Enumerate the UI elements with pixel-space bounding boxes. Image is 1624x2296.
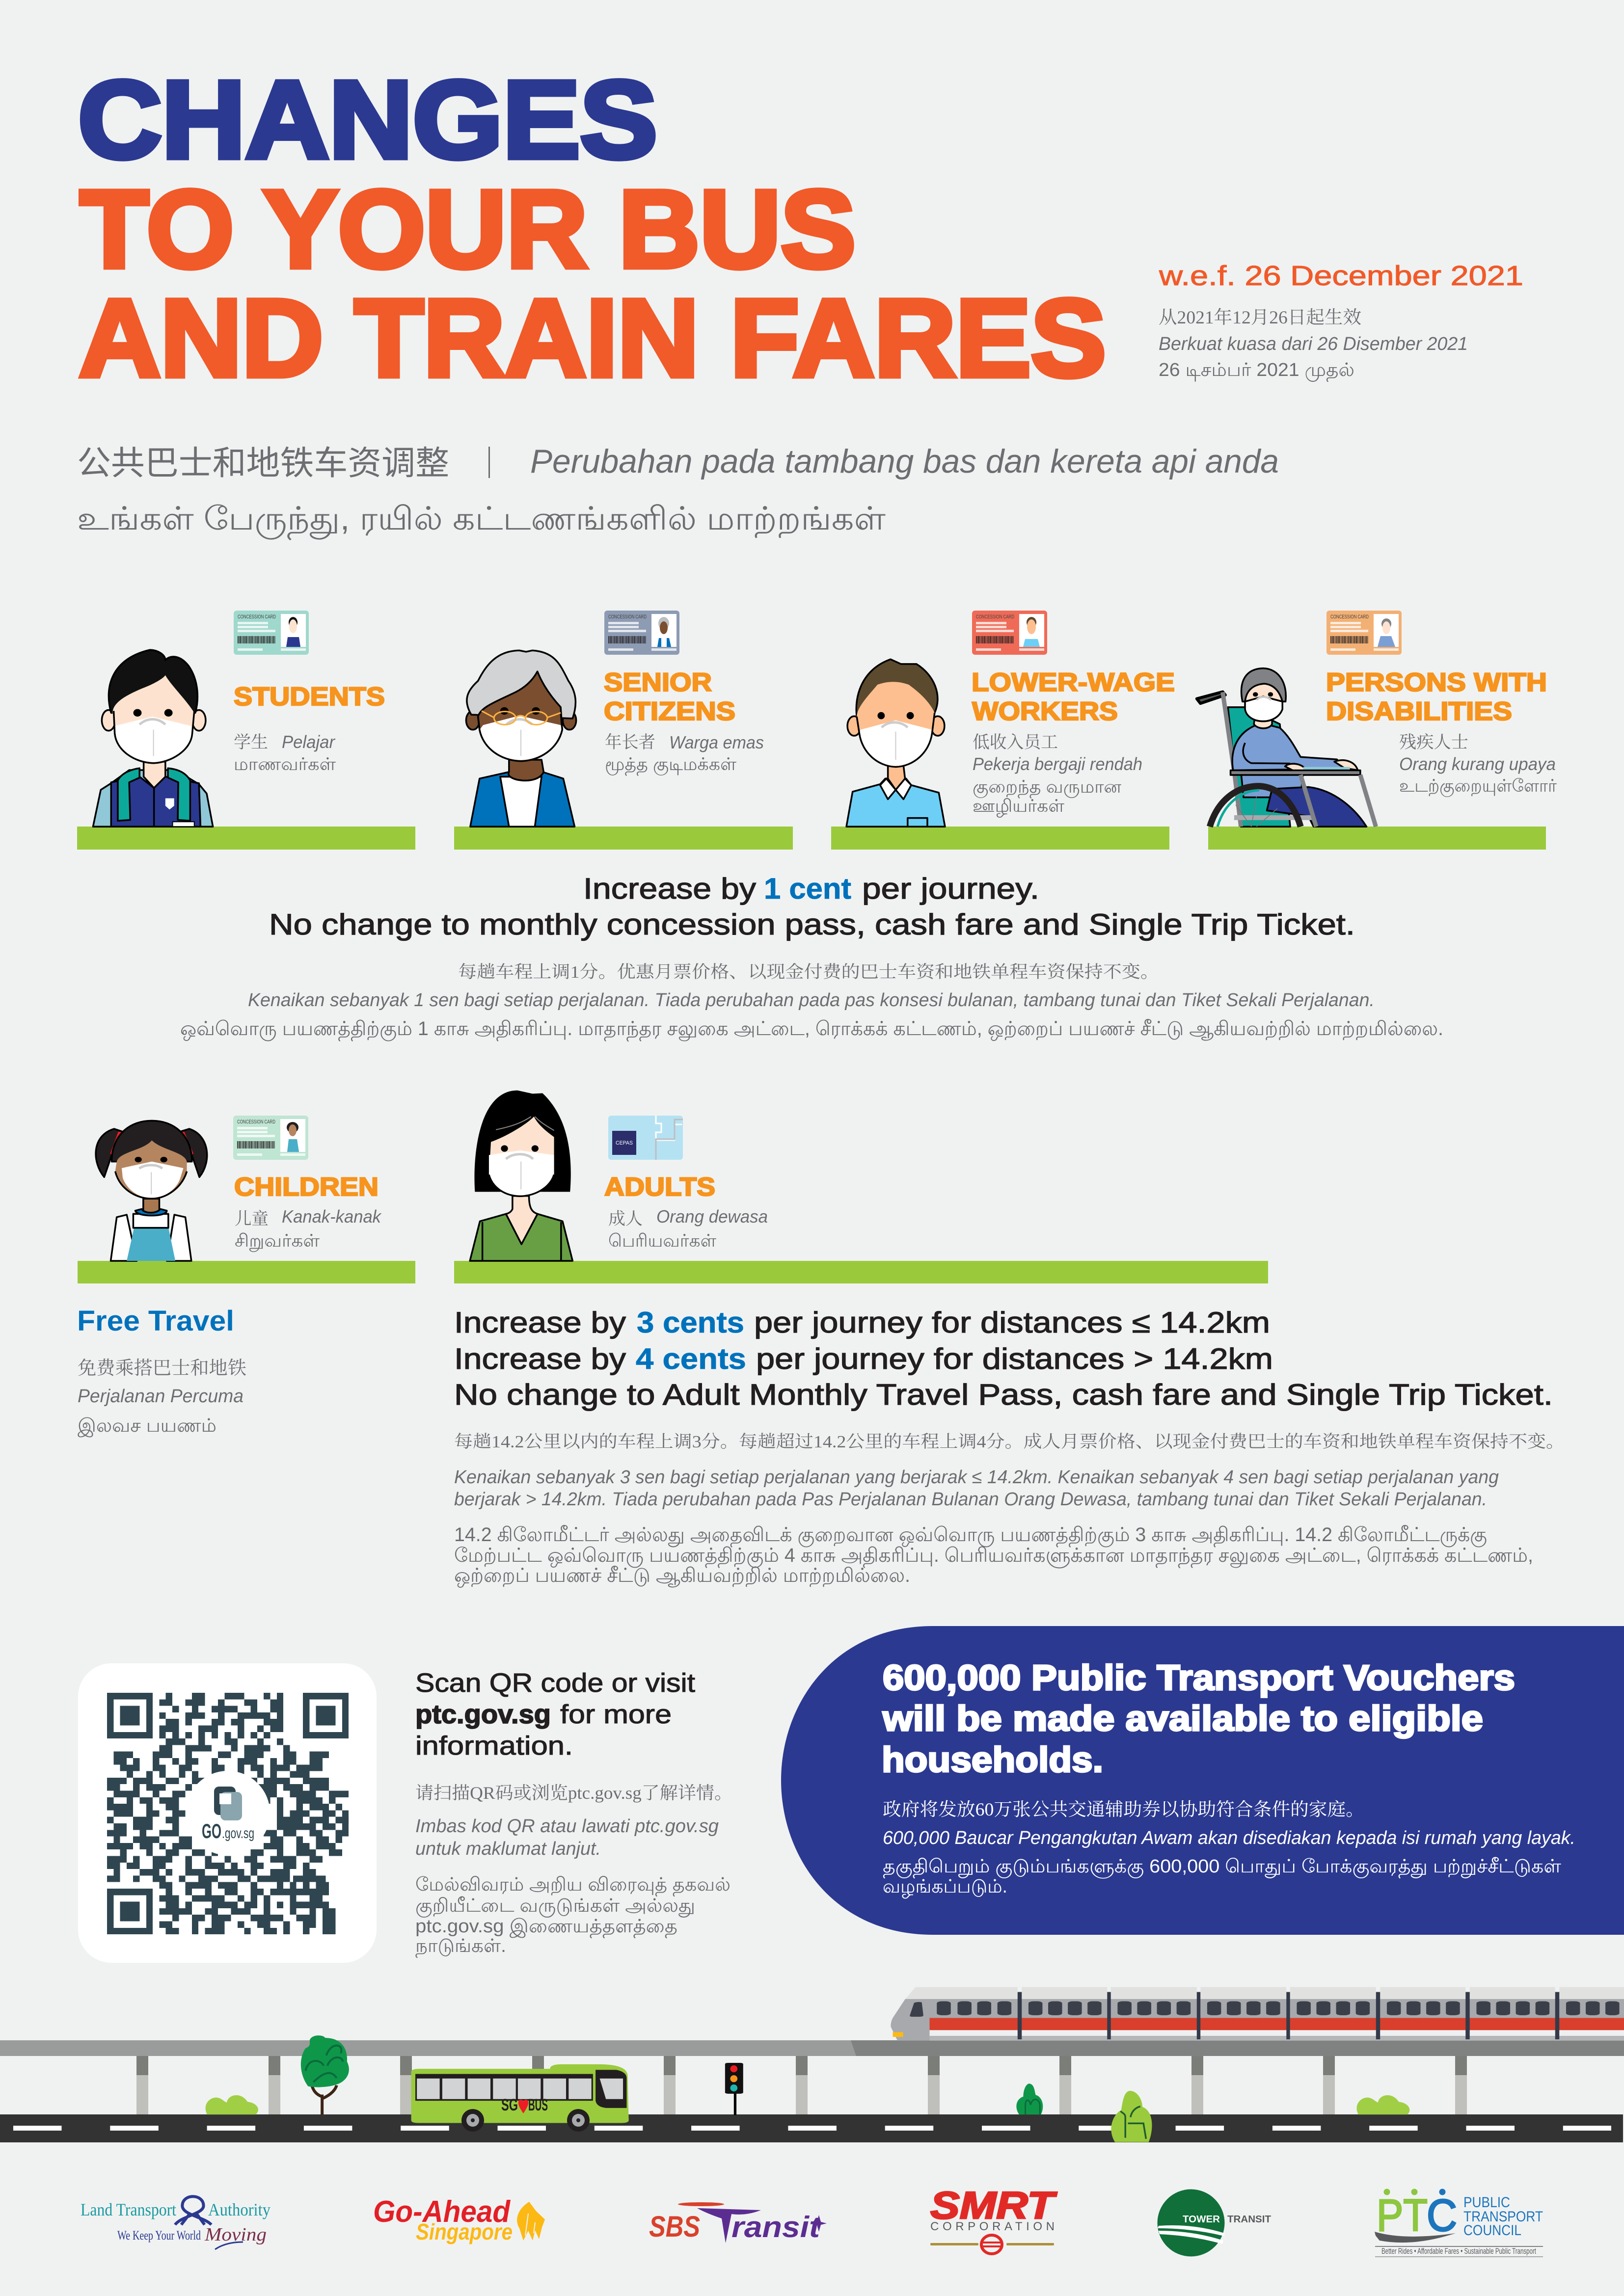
green bars [77,827,1546,850]
label: persons with disabilities: Orang kurang upaya [1399,754,1556,774]
free travel text: 免费乘搭巴士和地铁 [78,1358,246,1379]
QR code card: .gov.sg [222,1825,254,1842]
logo: Tower Transit: TOWER [1183,2214,1220,2225]
fare change: concession: Kenaikan sebanyak 1 sen bagi setiap perjalanan. Tiada perubahan pada pas konsesi bulanan, tambang tunai dan Tiket Sekali Perjalanan. [248,990,1375,1011]
QR instructions: 请扫描QR码或浏览ptc.gov.sg了解详情。 [415,1783,732,1803]
free travel text [77,1305,246,1437]
fare change: concession: 1 cent [764,872,851,905]
multilingual subtitle: Perubahan pada tambang bas dan kereta api anda [530,443,1279,480]
figure: child [96,1121,207,1261]
viaduct [0,2040,1624,2114]
label: students: Pelajar [282,732,336,752]
logo: Land Transport Authority: Land Transport [81,2200,176,2219]
label: students: மாணவர்கள் [234,754,336,774]
panel: public transport vouchers: 政府将发放60万张公共交通辅助券以协助符合条件的家庭。 [883,1799,1364,1820]
bus [411,2064,629,2132]
panel: concession groups [77,611,1557,850]
fare change: concession: Increase by [583,872,756,905]
fare change: adults [454,1306,1565,1588]
multilingual subtitle [77,443,1279,540]
panel: public transport vouchers: 600,000 Baucar Pengangkutan Awam akan disediakan kepada isi rumah yang layak. [883,1828,1575,1848]
fare change: adults: மேற்பட்ட ஒவ்வொரு பயணத்திற்கும் 4 காசு அதிகரிப்பு. பெரியவர்களுக்கான மாதாந்தர சலுகை அட்டை, ரொக்கக் கட்டணம், [454,1545,1533,1568]
free travel text: இலவச பயணம் [78,1415,217,1437]
label: persons with disabilities: DISABILITIES [1326,697,1512,726]
QR instructions [415,1668,732,1958]
fare change: concession [180,872,1443,1041]
logo: Land Transport Authority: Moving [204,2224,267,2245]
QR instructions: information. [415,1731,573,1761]
effective date: w.e.f. 26 December 2021 [1159,260,1523,292]
fare change: concession: per journey. [862,872,1039,905]
QR instructions: குறியீட்டை வருடுங்கள் அல்லது [415,1896,695,1918]
panel: public transport vouchers: will be made available to eligible [882,1699,1483,1738]
panel: public transport vouchers: வழங்கப்படும். [883,1876,1007,1899]
figure: adult [470,1091,572,1261]
label: lower-wage workers: Pekerja bergaji rendah [973,754,1142,774]
logo: Public Transport Council: PUBLIC [1463,2194,1510,2211]
card: children: CONCESSION CARD [237,1119,275,1125]
card: students: CONCESSION CARD [238,614,276,620]
card: senior citizens [604,611,679,655]
logo: Land Transport Authority [81,2196,271,2249]
label: persons with disabilities: PERSONS WITH [1326,668,1547,697]
label: children [234,1173,382,1252]
label: adults: பெரியவர்கள் [608,1230,717,1251]
QR instructions: மேல்விவரம் அறிய விரைவுத் தகவல் [415,1874,731,1896]
label: adults: Orang dewasa [656,1206,768,1227]
free travel text: Free Travel [77,1305,234,1337]
QR instructions: ptc.gov.sg [415,1700,551,1729]
effective date: 从2021年12月26日起生效 [1159,307,1361,328]
logo: SBS Transit: ransit [731,2211,821,2243]
label: senior citizens [604,668,764,776]
bus: BUS [528,2096,548,2114]
logo: SMRT Corporation: CORPORATION [930,2220,1055,2233]
label: students: STUDENTS [234,682,385,711]
fare change: adults: 3 cents [637,1306,744,1339]
card: lower-wage workers [972,611,1047,655]
label: lower-wage workers: குறைந்த வருமான [973,776,1121,799]
plants right [1016,2083,1409,2142]
logo: Public Transport Council: C [1427,2190,1457,2241]
panel: public transport vouchers: households. [882,1740,1103,1780]
card: students [234,611,309,655]
label: senior citizens: CITIZENS [604,697,735,726]
tree and shrub left [206,2035,349,2114]
multilingual subtitle: உங்கள் பேருந்து, ரயில் கட்டணங்களில் மாற்றங்கள் [77,500,886,540]
QR code card [78,1663,377,1963]
logo: Go-Ahead Singapore: Go-Ahead [373,2195,511,2229]
QR instructions: Scan QR code or visit [415,1668,695,1698]
label: lower-wage workers: 低收入员工 [973,733,1058,752]
logo: Go-Ahead Singapore: Singapore [416,2219,513,2244]
label: lower-wage workers: ஊழியர்கள் [973,796,1065,818]
fare change: adults: Increase by [454,1342,626,1375]
label: lower-wage workers [972,668,1175,818]
label: senior citizens: மூத்த குடிமக்கள் [605,754,737,776]
effective date [1159,260,1523,382]
train [891,1987,1624,2041]
QR instructions: நாடுங்கள். [415,1936,506,1958]
logo: Land Transport Authority: Authority [208,2200,271,2219]
traffic light [725,2063,743,2115]
fare change: concession: No change to monthly concession pass, cash fare and Single Trip Ticket. [269,908,1355,941]
QR instructions: Imbas kod QR atau lawati ptc.gov.sg [415,1816,719,1837]
QR instructions: untuk maklumat lanjut. [415,1839,601,1859]
title: TO YOUR BUS [80,168,856,291]
panel: public transport vouchers [781,1626,1624,1935]
title: CHANGES [78,58,657,181]
label: lower-wage workers: WORKERS [972,697,1118,726]
title [78,58,1106,400]
label: children: Kanak-kanak [282,1206,382,1227]
effective date: 26 டிசம்பர் 2021 முதல் [1159,360,1354,382]
label: students: 学生 [234,733,268,752]
panel: public transport vouchers: 600,000 Public Transport Vouchers [883,1658,1515,1698]
QR instructions: ptc.gov.sg இணையத்தளத்தை [415,1916,677,1938]
logo: Public Transport Council: COUNCIL [1463,2222,1521,2239]
logo: SBS Transit: SBS [649,2210,700,2243]
label: adults [604,1173,768,1251]
fare change: adults: per journey for distances > 14.2km [756,1342,1273,1375]
fare change: adults: Kenaikan sebanyak 3 sen bagi setiap perjalanan yang berjarak ≤ 14.2km. Kenaikan sebanyak 4 sen bagi setiap perjalanan yang [454,1467,1499,1488]
label: persons with disabilities [1326,668,1557,797]
label: senior citizens: 年长者 [605,733,655,752]
logo: SMRT Corporation: SMRT [930,2184,1057,2227]
title: AND TRAIN FARES [79,277,1106,400]
label: persons with disabilities: உடற்குறையுள்ளோர் [1399,775,1557,797]
card: senior citizens: CONCESSION CARD [608,614,647,620]
figure: lower-wage worker [846,659,945,827]
figure: person in wheelchair [1197,668,1376,827]
logo: Public Transport Council: Better Rides • Affordable Fares • Sustainable Public Transport [1381,2246,1536,2256]
logo: Tower Transit [1158,2189,1271,2257]
figure: senior citizen [466,650,576,827]
effective date: Berkuat kuasa dari 26 Disember 2021 [1159,334,1468,354]
logo: Go-Ahead Singapore [373,2195,545,2244]
logo: SBS Transit [649,2202,827,2243]
fare change: adults: 每趟14.2公里以内的车程上调3分。每趟超过14.2公里的车程上调4分。成人月票价格、以现金付费巴士的车资和地铁单程车资保持不变。 [454,1432,1565,1451]
road [0,2114,1623,2142]
fare change: adults: ஒற்றைப் பயணச் சீட்டு ஆகியவற்றில் மாற்றமில்லை. [454,1565,910,1588]
label: persons with disabilities: 残疾人士 [1399,733,1468,752]
logo: Public Transport Council: PT [1377,2190,1428,2241]
label: adults: 成人 [608,1209,643,1228]
QR instructions: for more [560,1700,672,1729]
card: CEPAS [608,1116,683,1160]
logo: Public Transport Council: TRANSPORT [1463,2209,1543,2225]
label: senior citizens: Warga emas [669,732,764,752]
logo: Public Transport Council [1375,2189,1543,2257]
fare change: adults: berjarak > 14.2km. Tiada perubahan pada Pas Perjalanan Bulanan Orang Dewasa, tambang tunai dan Tiket Sekali Perjalanan. [454,1489,1487,1510]
logo: Tower Transit: TRANSIT [1227,2214,1271,2225]
label: children: சிறுவர்கள் [235,1230,320,1252]
green bars [78,1261,1268,1283]
fare change: adults: 4 cents [636,1342,746,1375]
figure: student [93,650,213,827]
transport scene [0,1987,1624,2142]
multilingual subtitle: 公共巴士和地铁车资调整 [77,445,449,482]
fare change: concession: ஒவ்வொரு பயணத்திற்கும் 1 காசு அதிகரிப்பு. மாதாந்தர சலுகை அட்டை, ரொக்கக் கட்டணம், ஒற்றைப் பயணச் சீட்டு ஆகியவற்றில் மாற்றமில்லை. [180,1018,1443,1041]
logo: Land Transport Authority: We Keep Your World [117,2228,201,2243]
card: persons with disabilities: CONCESSION CARD [1330,614,1369,620]
free travel text: Perjalanan Percuma [78,1386,244,1407]
card: persons with disabilities [1326,611,1402,655]
panel: public transport vouchers: தகுதிபெறும் குடும்பங்களுக்கு 600,000 பொதுப் போக்குவரத்து பற்றுச்சீட்டுகள் [883,1856,1562,1879]
label: children: 儿童 [235,1209,269,1228]
card: lower-wage workers: CONCESSION CARD [976,614,1014,620]
fare change: adults: No change to Adult Monthly Travel Pass, cash fare and Single Trip Ticket. [454,1378,1553,1411]
bus: SG [501,2096,518,2114]
card: CEPAS: CEPAS [616,1140,633,1146]
label: adults: ADULTS [604,1173,715,1201]
label: students [234,682,385,774]
logo: SMRT Corporation [930,2184,1057,2254]
label: senior citizens: SENIOR [604,668,712,697]
fare change: adults: Increase by [454,1306,626,1339]
fare change: adults: per journey for distances ≤ 14.2km [754,1306,1270,1339]
fare change: adults: 14.2 கிலோமீட்டர் அல்லது அதைவிடக் குறைவான ஒவ்வொரு பயணத்திற்கும் 3 காசு அதிகரிப்பு. 14.2 கிலோமீட்டருக்கு [454,1524,1487,1548]
label: children: CHILDREN [234,1173,379,1201]
label: lower-wage workers: LOWER-WAGE [972,668,1175,697]
card: children [233,1116,308,1160]
QR code card: GO [202,1819,221,1842]
fare change: concession: 每趟车程上调1分。优惠月票价格、以现金付费的巴士车资和地铁单程车资保持不变。 [458,962,1159,982]
panel: children and adults [78,1091,1268,1283]
